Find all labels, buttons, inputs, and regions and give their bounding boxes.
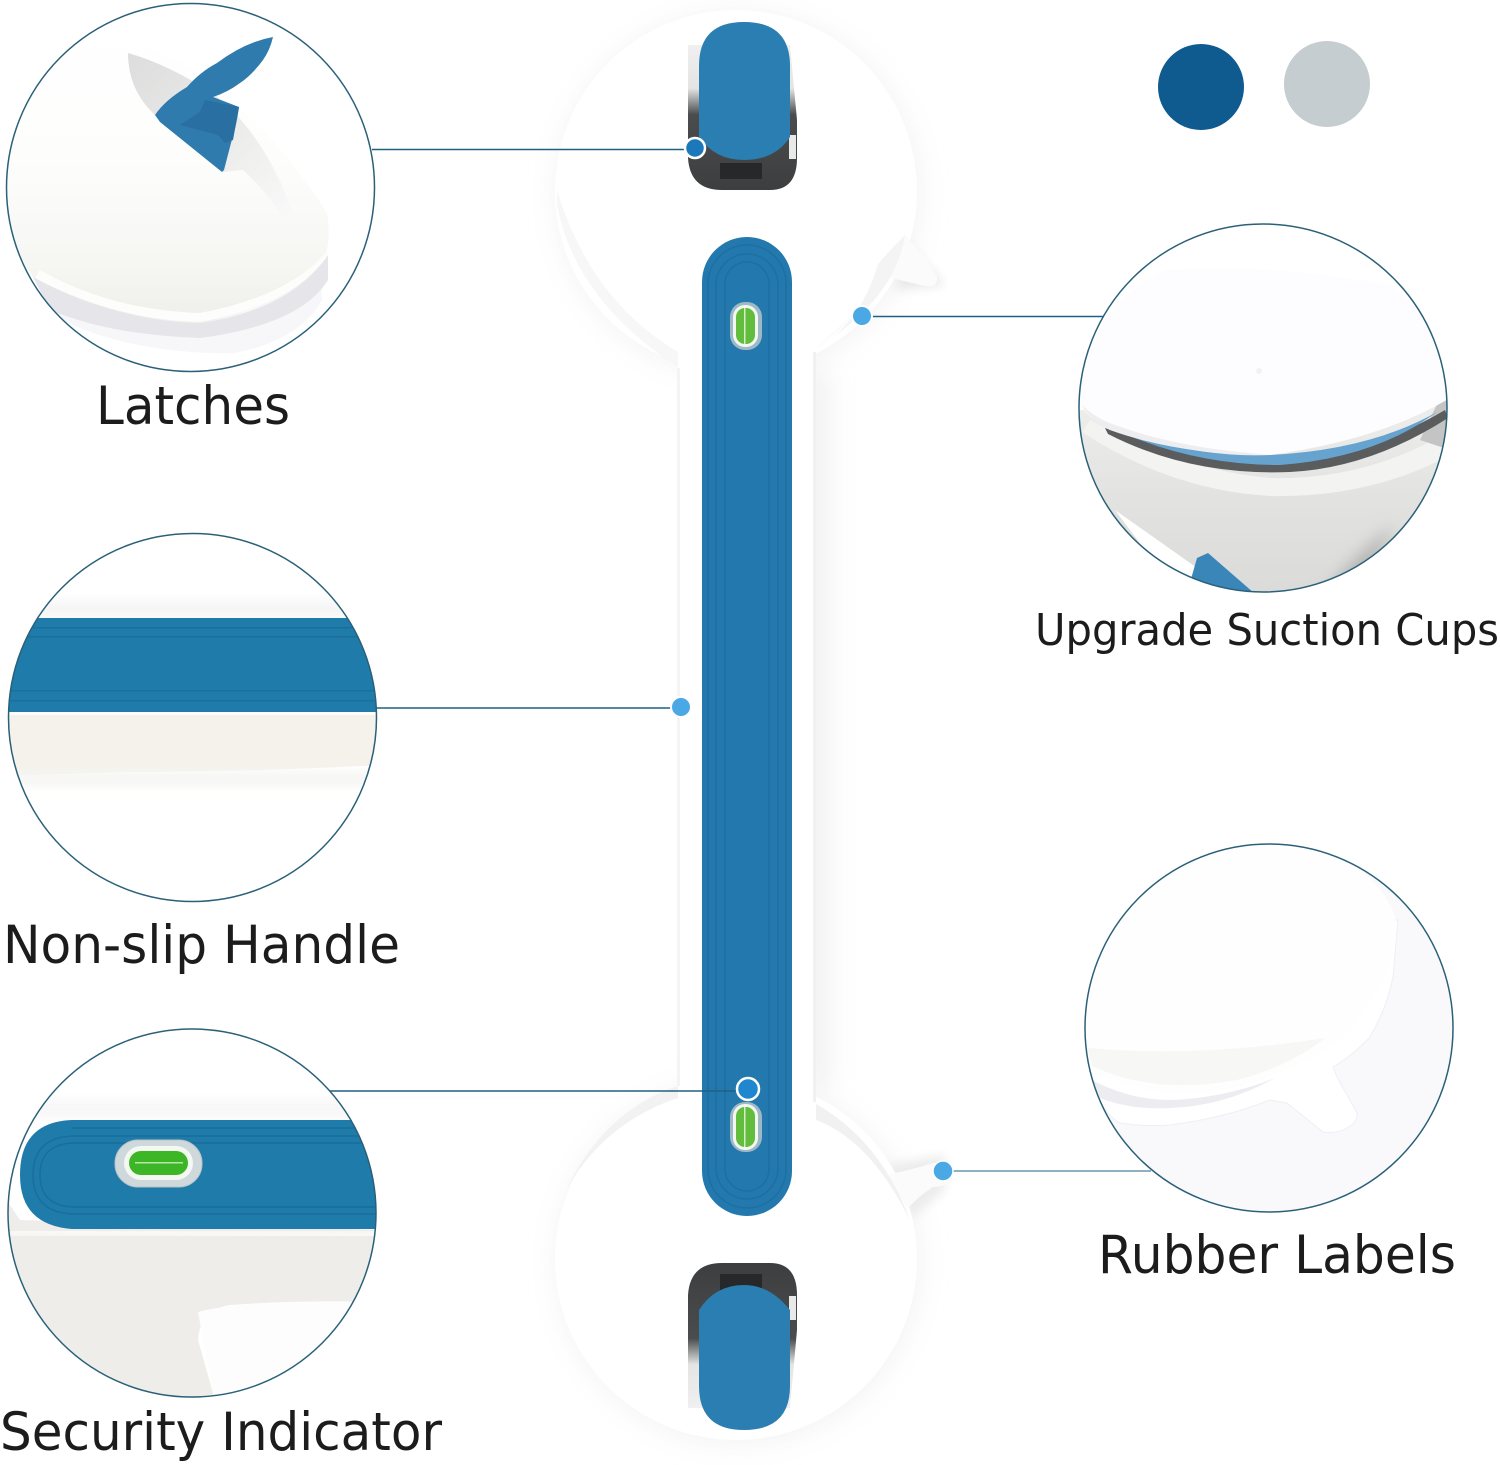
- leader line: security indicator: [330, 1090, 748, 1092]
- latch housing: [10, 219, 328, 323]
- latch recess: [128, 53, 276, 186]
- grey cup body: [1080, 406, 1438, 592]
- security indicator bottom: [730, 1102, 762, 1152]
- gasket shadow: [1092, 1078, 1275, 1108]
- grab bar product: [555, 10, 953, 1443]
- callout dot: latches: [685, 138, 705, 158]
- leader line: suction cups: [862, 316, 1104, 318]
- colour swatch: blue: [1158, 44, 1244, 130]
- panel: rubber labels close-up: [1080, 835, 1460, 1215]
- label: Non-slip Handle: Non-slip Handle: [3, 915, 400, 976]
- callout dot: rubber labels: [933, 1161, 953, 1181]
- callout dot: non-slip handle: [671, 697, 691, 717]
- ring: [1085, 844, 1453, 1212]
- label: Latches: Latches: [96, 376, 290, 437]
- blue latch tab: [155, 37, 273, 172]
- rubber tab shadow top: [895, 240, 945, 290]
- ring: [6, 4, 374, 372]
- handle underside: [9, 715, 376, 773]
- dark gasket: [1105, 410, 1448, 472]
- panel: latches close-up: [0, 0, 380, 380]
- rubber tab shadow bottom: [885, 1155, 945, 1220]
- label: Rubber Labels: Rubber Labels: [1098, 1225, 1456, 1286]
- ring: [1079, 224, 1447, 592]
- cup dome: [1090, 920, 1395, 1070]
- body: [8, 1204, 374, 1396]
- panel: non-slip handle close-up: [0, 530, 380, 905]
- security indicator top: [730, 302, 762, 350]
- blue grip band: [0, 618, 380, 712]
- handle body: [677, 330, 816, 1120]
- bottom latch: [688, 1263, 797, 1430]
- leader line: non-slip handle: [376, 707, 681, 709]
- ring: [8, 1029, 376, 1397]
- panel: security indicator close-up: [0, 1025, 385, 1400]
- colour swatch: grey: [1284, 41, 1370, 127]
- label: Security Indicator: Security Indicator: [0, 1402, 442, 1463]
- bottom suction cup: [555, 1078, 953, 1440]
- non-slip blue grip strip: [702, 237, 792, 1216]
- ring: [8, 534, 376, 902]
- blue rim: [1130, 412, 1437, 465]
- white plate: [1084, 398, 1446, 455]
- callout dot: security indicator: [737, 1078, 759, 1100]
- callout dot: suction cups: [852, 306, 872, 326]
- top suction cup: [555, 10, 937, 372]
- rubber disc with tab: [1090, 920, 1398, 1132]
- panel: suction cup close-up: [1075, 220, 1455, 600]
- soft shadow: [557, 13, 919, 1443]
- leader line: rubber labels: [943, 1170, 1151, 1172]
- leader line: latches: [372, 148, 695, 150]
- indicator lens: [115, 1140, 202, 1187]
- top latch: [688, 22, 797, 190]
- grey gasket: [33, 255, 328, 338]
- suction plate: [33, 265, 322, 353]
- blue grip: [20, 1120, 385, 1229]
